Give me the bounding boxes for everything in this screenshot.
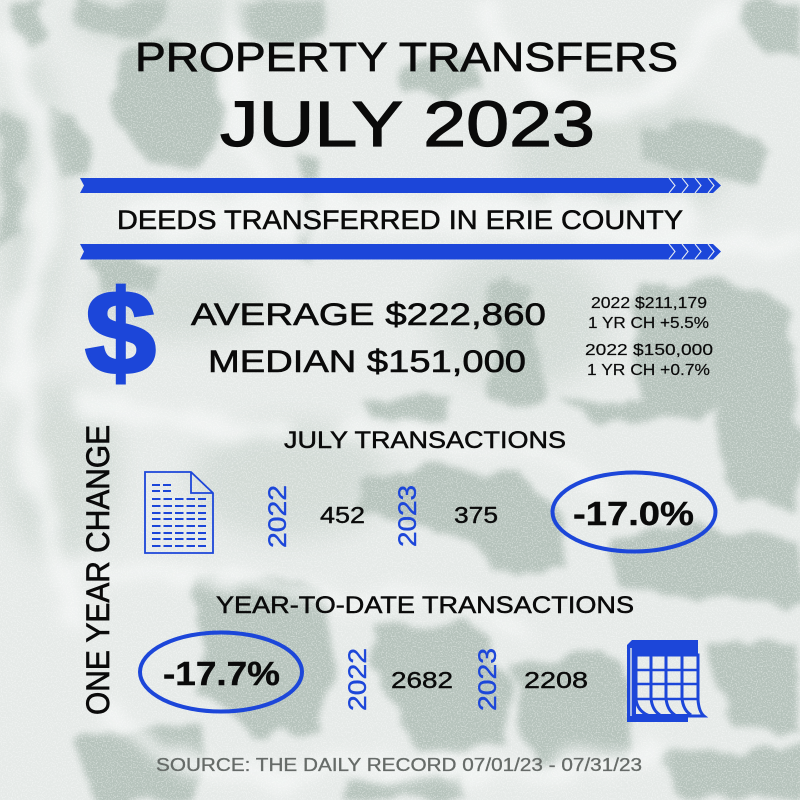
year-to-date 2023 value: 2023 <box>474 648 502 711</box>
prior year comparison: 1 YR CH +5.5% <box>588 315 709 332</box>
year-to-date 2022 value <box>344 648 453 711</box>
prior year comparison: 2022 $211,179 <box>591 295 707 312</box>
heading: july transactions: JULY TRANSACTIONS <box>284 427 566 454</box>
july 2022 value: 452 <box>320 502 365 528</box>
july 2023 value: 2023 <box>394 485 422 547</box>
year-to-date 2022 value: 2022 <box>344 648 372 711</box>
icon: calendar <box>627 640 704 722</box>
callout: year-to-date change <box>140 632 302 712</box>
subtitle: DEEDS TRANSFERRED IN ERIE COUNTY <box>117 205 683 235</box>
title: JULY 2023 <box>220 88 595 160</box>
bottom banner arrow <box>80 244 721 260</box>
source: SOURCE: THE DAILY RECORD 07/01/23 - 07/31/23 <box>156 755 642 775</box>
year-to-date 2022 value: 2682 <box>391 667 453 693</box>
prior year comparison: 1 YR CH +0.7% <box>587 362 710 379</box>
july 2023 value: 375 <box>454 502 498 528</box>
icon: document <box>145 472 213 553</box>
icon: dollar sign: $ <box>85 266 156 400</box>
vertical label: one year change: ONE YEAR CHANGE <box>80 425 116 715</box>
july 2023 value <box>394 485 498 547</box>
july 2022 value <box>264 485 365 548</box>
callout: year-to-date change: -17.7% <box>163 655 280 692</box>
title <box>135 34 678 160</box>
callout: july change: -17.0% <box>573 495 694 532</box>
callout: july change <box>552 472 716 552</box>
prior year comparison <box>585 295 713 379</box>
july 2022 value: 2022 <box>264 485 292 548</box>
average and median prices: AVERAGE $222,860 <box>191 296 546 332</box>
year-to-date 2023 value: 2208 <box>524 667 588 693</box>
average and median prices: MEDIAN $151,000 <box>208 343 526 379</box>
heading: year-to-date transactions: YEAR-TO-DATE TRANSACTIONS <box>216 592 634 619</box>
prior year comparison: 2022 $150,000 <box>585 342 713 359</box>
average and median prices <box>191 296 546 379</box>
title: PROPERTY TRANSFERS <box>135 34 678 80</box>
year-to-date 2023 value <box>474 648 588 711</box>
top banner arrow <box>80 178 721 193</box>
